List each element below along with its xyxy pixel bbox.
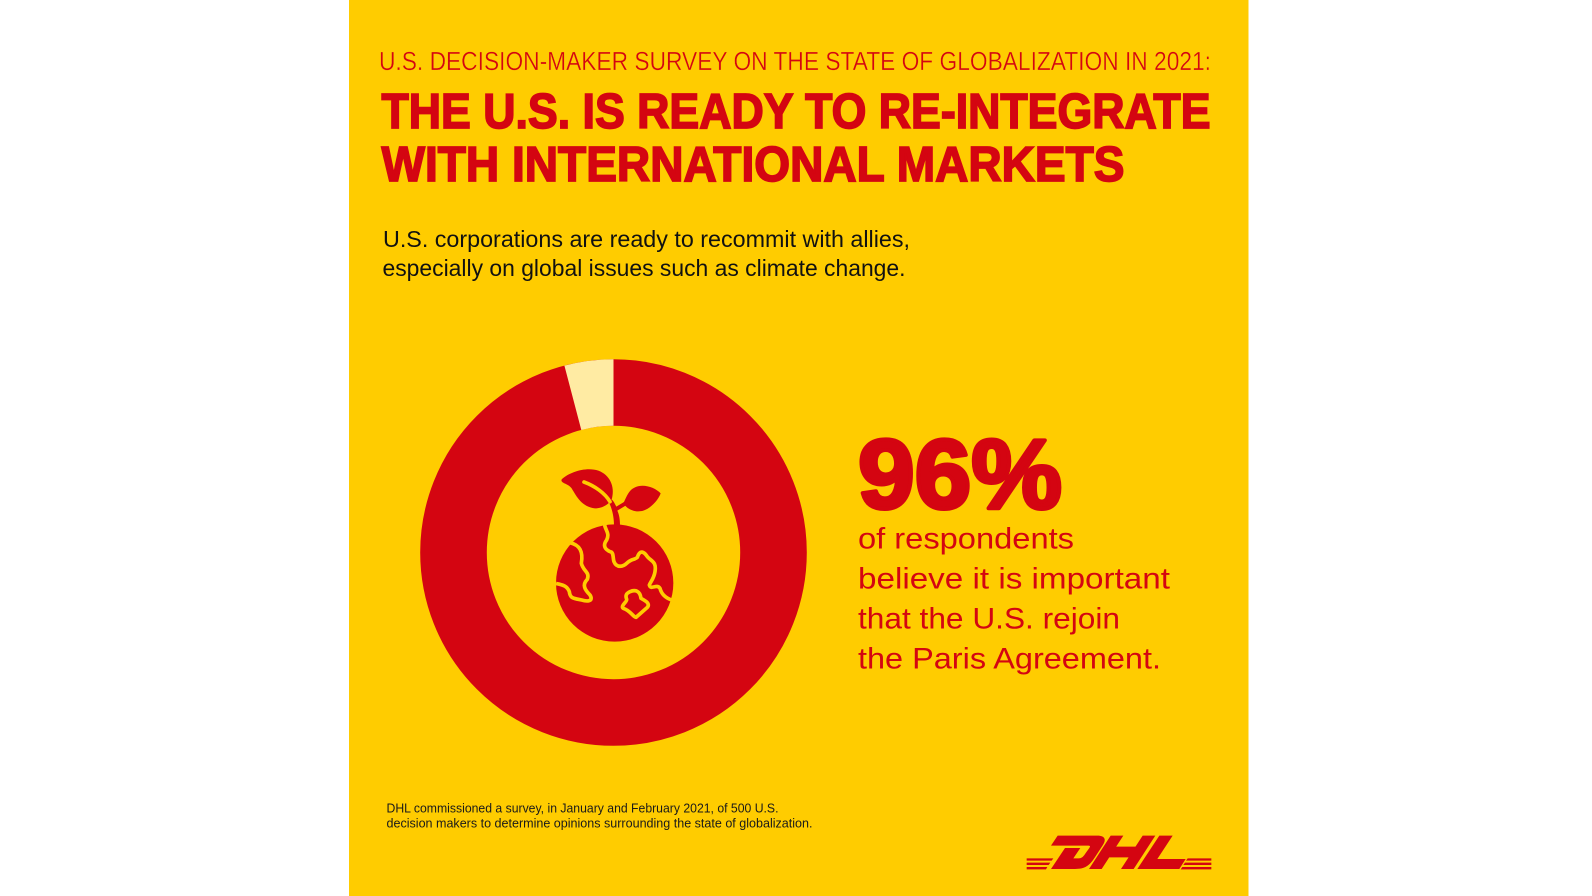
footnote: DHL commissioned a survey, in January and February 2021, of 500 U.S. bbox=[386, 802, 778, 816]
panel: yellow background bbox=[349, 0, 1248, 896]
logo: DHL bbox=[1027, 836, 1211, 869]
icon: globe with sprout bbox=[556, 469, 673, 642]
footnote bbox=[386, 802, 812, 830]
title bbox=[382, 85, 1210, 192]
ring: 96 percent segment bbox=[454, 392, 774, 712]
subtitle: U.S. DECISION-MAKER SURVEY ON THE STATE OF GLOBALIZATION IN 2021: bbox=[379, 46, 1211, 76]
intro text: especially on global issues such as climate change. bbox=[382, 255, 906, 281]
statistic description: the Paris Agreement. bbox=[858, 642, 1161, 675]
footnote: decision makers to determine opinions surrounding the state of globalization. bbox=[386, 816, 812, 830]
statistic description: that the U.S. rejoin bbox=[858, 602, 1120, 635]
statistic description: believe it is important bbox=[858, 562, 1170, 595]
intro text bbox=[382, 226, 910, 281]
title: WITH INTERNATIONAL MARKETS bbox=[382, 138, 1124, 192]
statistic description bbox=[858, 522, 1170, 675]
donut chart: 96 percent bbox=[454, 359, 774, 712]
statistic description: of respondents bbox=[858, 522, 1074, 555]
title: THE U.S. IS READY TO RE-INTEGRATE bbox=[382, 85, 1210, 139]
ring: 4 percent segment bbox=[564, 359, 614, 430]
intro text: U.S. corporations are ready to recommit with allies, bbox=[383, 226, 910, 252]
statistic: 96%: 96% bbox=[858, 419, 1062, 529]
